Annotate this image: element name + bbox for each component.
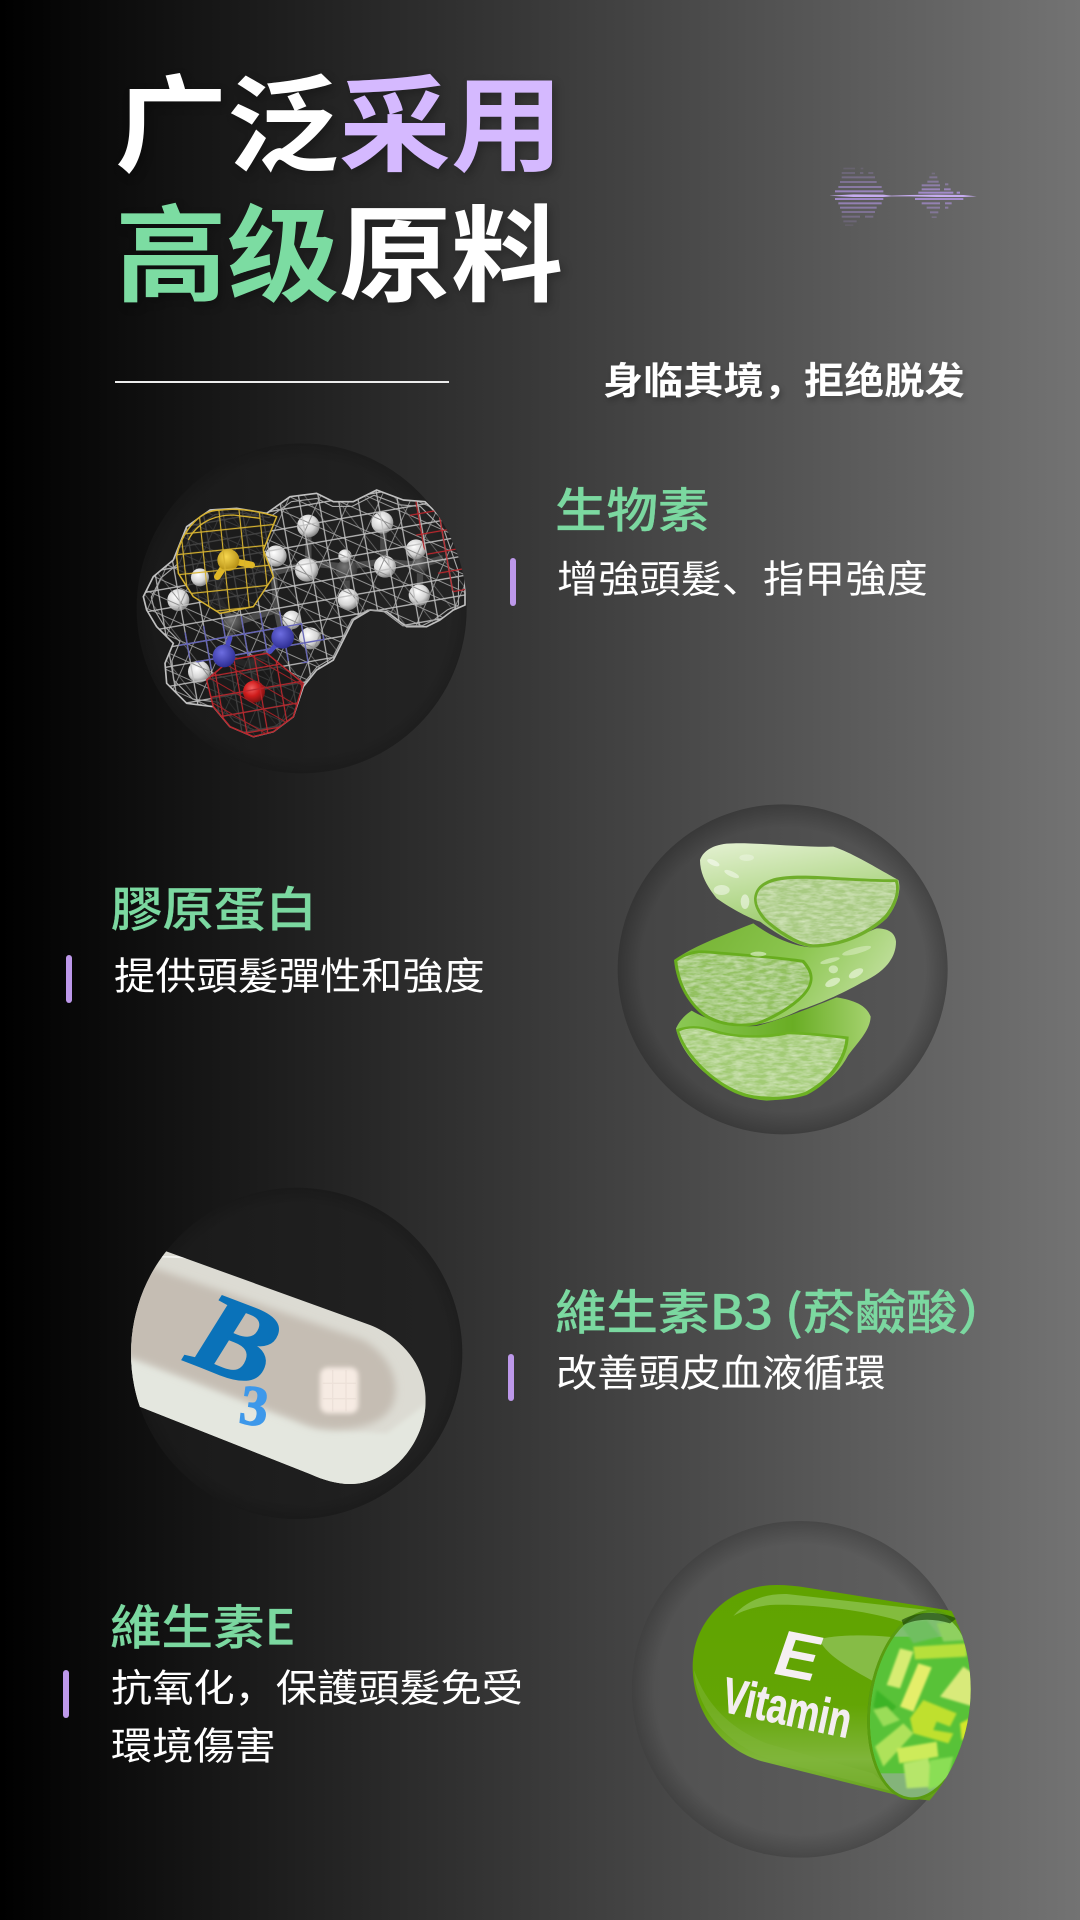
circle backdrop [131,1188,462,1519]
circle backdrop [632,1521,968,1858]
capsule clear end with chunks [867,1610,971,1800]
capsule shell [693,1585,957,1803]
panel: vitamin E [63,1521,971,1858]
heading: 維生素E [110,1589,295,1658]
subtitle: 身临其境，拒绝脱发 [603,351,965,405]
label: B3 lettering: 3 [236,1374,273,1439]
middle slice [674,923,896,1026]
capsule body [131,1251,426,1484]
description: 提供頭髮彈性和強度 [114,945,485,1001]
description: 改善頭皮血液循環 [556,1342,886,1398]
title line two: 高级原料 [115,172,563,324]
panel: vitamin B3 [131,1192,1009,1516]
top slice [700,843,899,947]
heading: 膠原蛋白 [111,871,317,940]
image: aloe slices in circle [618,804,948,1134]
mesh: grey [143,490,465,737]
description [111,1657,523,1771]
heading: 維生素B3 (菸鹼酸） [555,1274,1009,1343]
description: 增強頭髮、指甲強度 [557,548,928,604]
image: vitamin E capsule in circle [650,1521,971,1858]
label: E lettering: E [765,1617,832,1695]
icon: sound wave [830,168,976,226]
bonds [212,533,444,681]
description: 環境傷害 [111,1715,276,1771]
title [115,42,563,324]
panel: biotin [140,448,928,769]
description: 抗氧化，保護頭髮免受 [111,1657,523,1713]
bullet bar [63,1670,69,1718]
image: B3 capsule in circle [131,1192,462,1516]
circle backdrop [618,804,948,1134]
heading: 生物素 [555,472,710,541]
label: B3 lettering: B [173,1267,296,1412]
title line one: 广泛采用 [115,42,563,194]
panel: collagen [66,804,948,1134]
divider line [115,381,449,383]
mesh: yellow region [177,509,277,613]
mesh: red right region [410,502,465,592]
bullet bar [510,558,516,606]
circle backdrop [137,443,467,773]
bottom slice [676,997,871,1101]
mesh: red bottom region [207,653,303,737]
label: Vitamin lettering: Vitamin [717,1667,857,1749]
mesh: blue region [173,610,327,670]
atoms: hydrogen and carbon [167,512,461,683]
bullet bar [508,1354,514,1401]
bullet bar [66,955,72,1003]
image: molecule mesh in circle [140,448,466,769]
atoms: nitrogen [213,626,294,667]
